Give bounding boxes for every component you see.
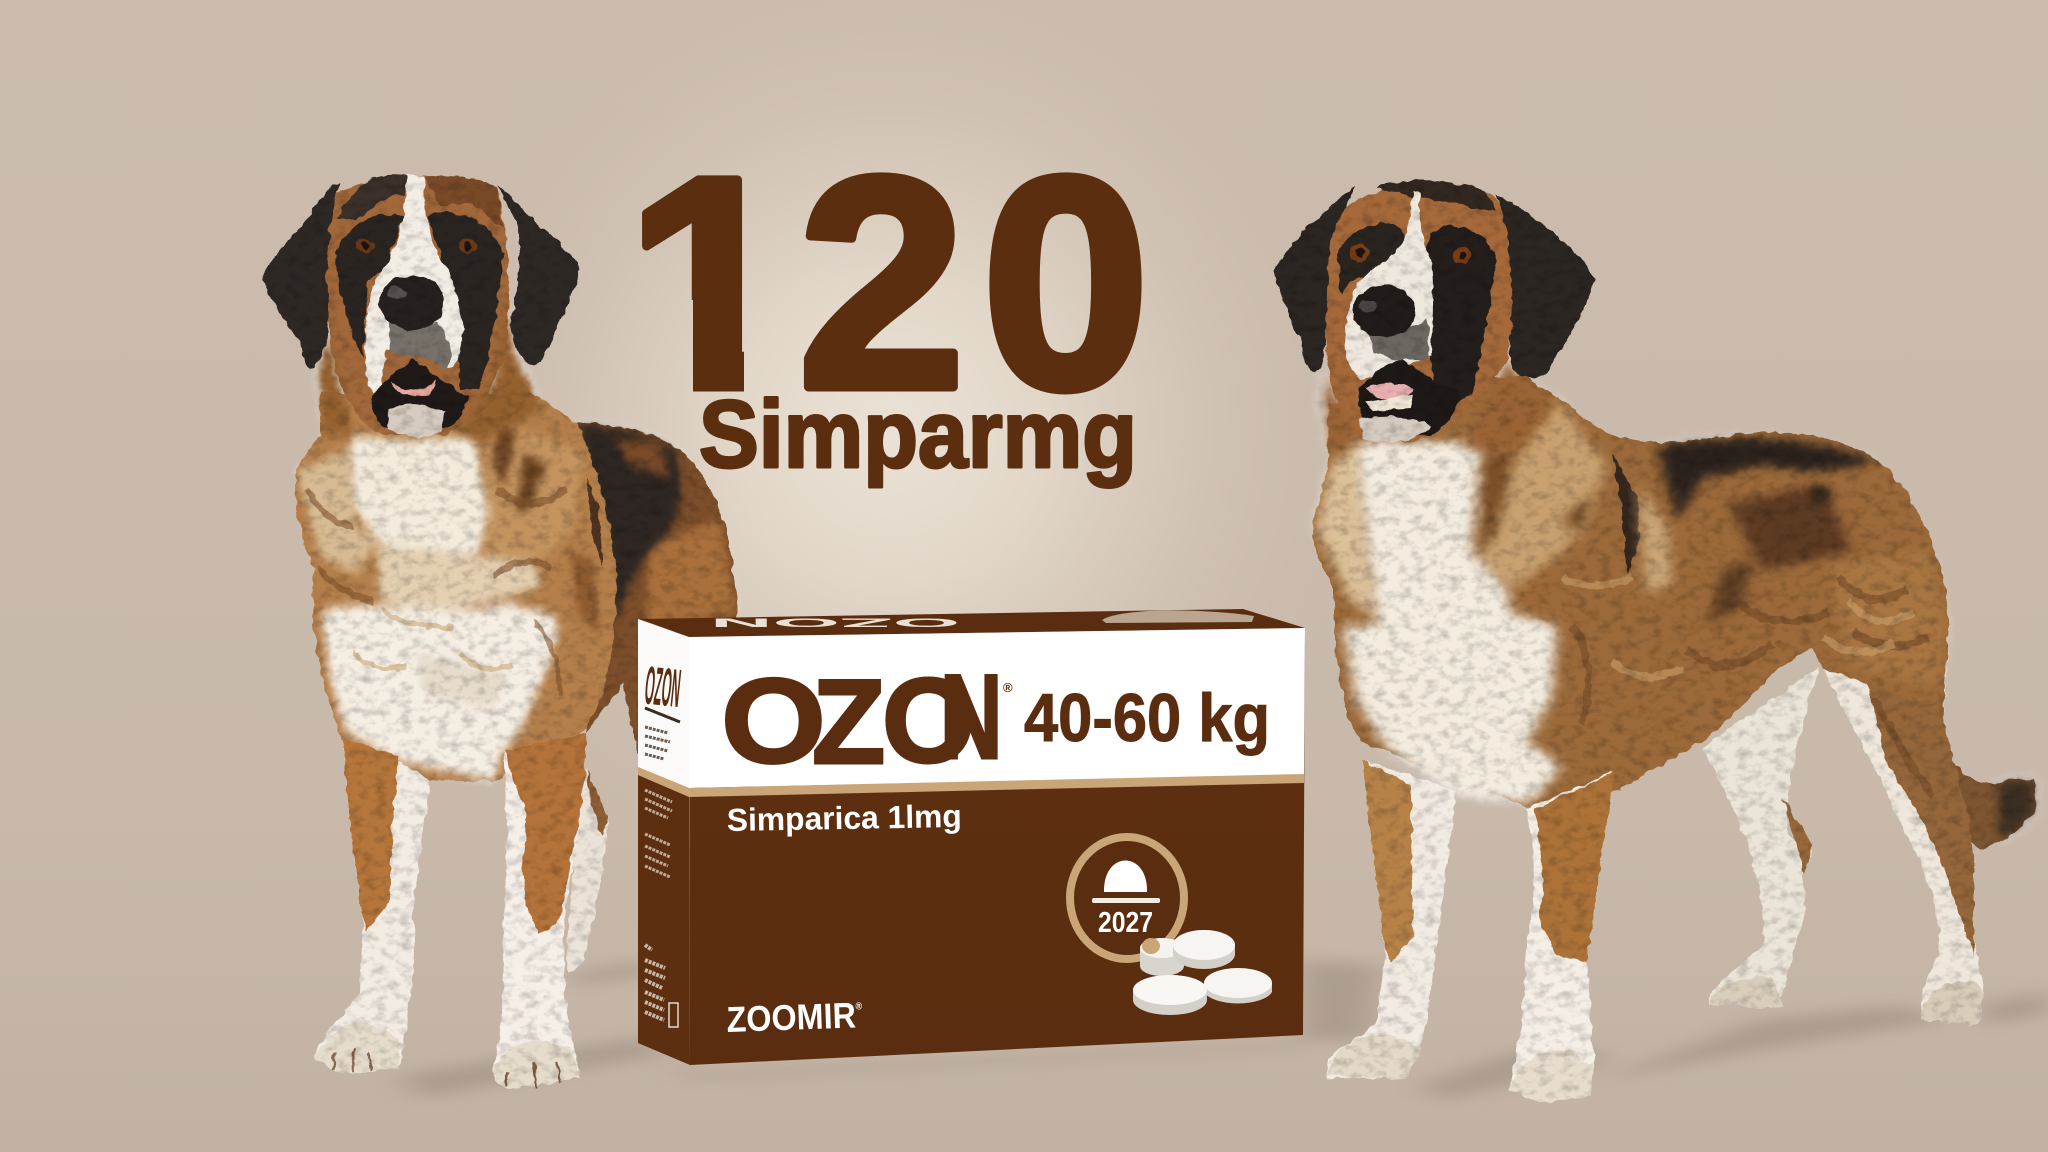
- left dog ears: [262, 183, 581, 368]
- front tablet: [1133, 975, 1207, 1015]
- product box: [638, 609, 1305, 1065]
- year badge: 2027: [1098, 907, 1153, 939]
- small tablet behind: [1140, 938, 1184, 976]
- brand name: ZOOMIR: [726, 994, 871, 1040]
- left dog head: [317, 174, 540, 441]
- box top face: [640, 609, 1305, 637]
- left dog front left leg: [315, 738, 430, 1074]
- back tablet: [1173, 930, 1235, 969]
- box left side panel: [638, 619, 690, 1065]
- registered mark: ®: [1003, 680, 1013, 695]
- left dog torso: [295, 392, 616, 780]
- OZON logo: O: [882, 654, 975, 788]
- right dog: [1274, 181, 2037, 1103]
- floor shadows: [400, 960, 2048, 1100]
- number 20: 20: [798, 115, 1149, 451]
- Simparmg label: Simparmg: [699, 381, 1137, 488]
- product strength: Simparica 1lmg: [726, 798, 962, 838]
- right dog near hind leg: [1823, 638, 1984, 1024]
- weight range: 40-60 kg: [1024, 680, 1270, 756]
- right dog head: [1320, 181, 1557, 454]
- product box: OZON: [642, 656, 683, 719]
- right tablet: [1204, 968, 1272, 1003]
- right dog ears: [1274, 186, 1596, 378]
- OZON logo: N: [940, 650, 1002, 784]
- left dog far hind leg: [567, 768, 608, 974]
- right dog front legs: [1328, 760, 1614, 1103]
- top face mirrored text: OZON: [710, 616, 960, 630]
- OZON logo: O: [720, 653, 827, 788]
- year badge: [1070, 837, 1184, 959]
- OZON logo: [720, 650, 1002, 789]
- box front face: [689, 628, 1305, 1065]
- OZON logo: Z: [812, 655, 885, 789]
- tablets: [1133, 930, 1272, 1015]
- brand name: ®: [855, 1001, 863, 1012]
- right dog tail: [1933, 742, 2037, 849]
- left dog: [262, 174, 737, 1089]
- left dog hindquarters: [557, 423, 737, 756]
- right dog far hind leg: [1702, 668, 1818, 1008]
- number 1: 1: [626, 115, 793, 451]
- right dog body: [1312, 374, 1948, 809]
- left dog front right leg: [492, 732, 587, 1089]
- title number and unit: [642, 172, 1142, 489]
